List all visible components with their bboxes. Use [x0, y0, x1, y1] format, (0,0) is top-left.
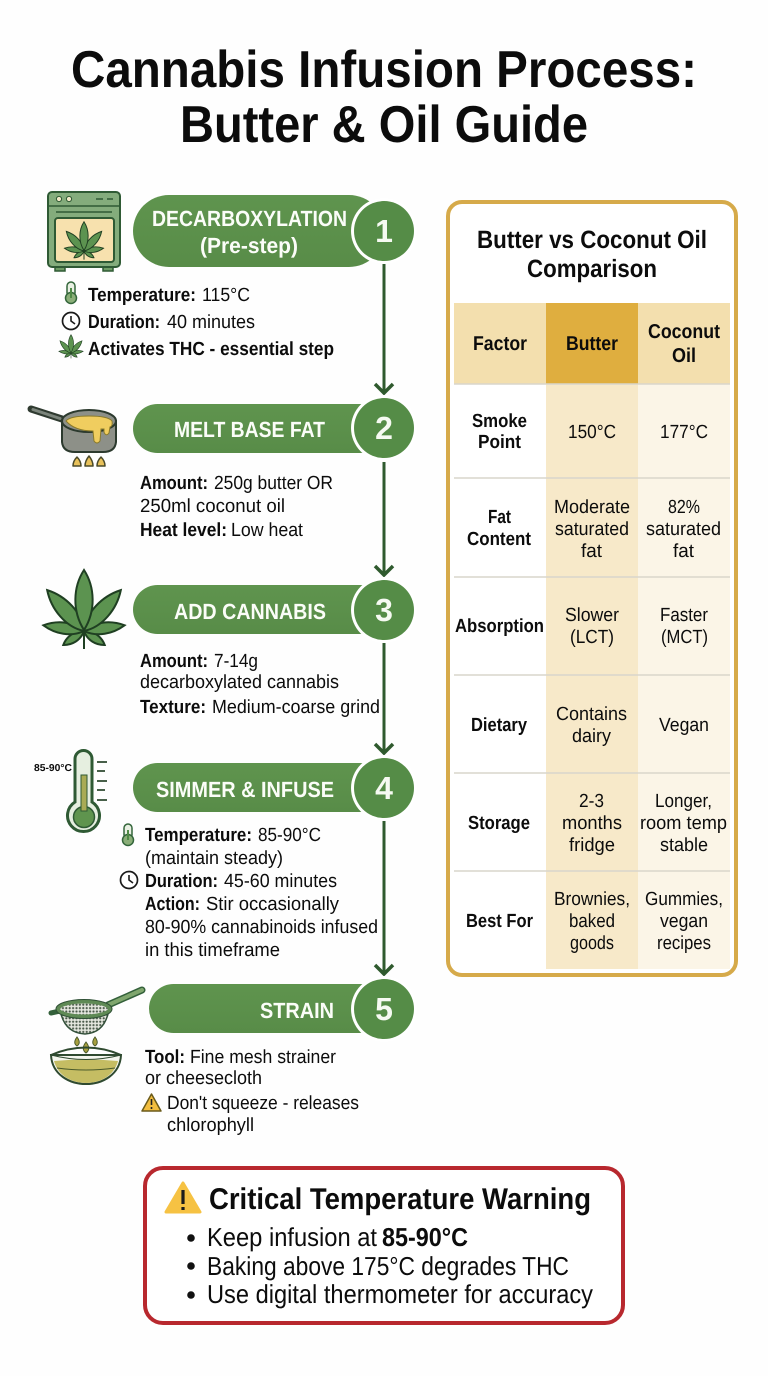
warning bullet list: 85-90°C — [382, 1222, 468, 1252]
step 5 details: chlorophyll — [167, 1115, 254, 1136]
step 5 details: Don't squeeze - releases — [167, 1093, 359, 1114]
icon: cannabis leaf — [41, 570, 127, 649]
row: fat content: 82% — [668, 497, 700, 518]
step 3: add cannabis — [41, 570, 417, 718]
row: best for: vegan — [660, 911, 708, 932]
row: fat content: fat — [673, 541, 695, 562]
table heading — [477, 226, 707, 283]
step 1 details: 115°C — [202, 285, 250, 306]
row: dietary: Vegan — [659, 715, 709, 736]
step 4 details: Stir occasionally — [206, 894, 339, 915]
table heading: Butter vs Coconut Oil — [477, 226, 707, 254]
row: storage: fridge — [569, 835, 615, 856]
step 1 details: Activates THC - essential step — [88, 339, 334, 360]
warning bullet list: Keep infusion at — [207, 1222, 378, 1252]
step 4 details: Temperature: — [145, 825, 252, 846]
row: fat content — [467, 497, 721, 562]
step 4: simmer and infuse — [34, 750, 417, 961]
icon: pot on burner — [31, 409, 116, 466]
row: fat content: saturated — [555, 519, 629, 540]
table header row: Coconut — [648, 321, 720, 343]
step 2 details: 250ml coconut oil — [140, 496, 285, 517]
step 2 details — [140, 473, 333, 541]
row: fat content: Content — [467, 529, 532, 550]
title: Cannabis Infusion Process: — [71, 41, 697, 99]
row: fat content: saturated — [646, 519, 721, 540]
row: absorption: Absorption — [455, 616, 544, 637]
step 4 details: 80-90% cannabinoids infused — [145, 917, 378, 938]
pill heading: decarboxylation — [133, 195, 385, 267]
row: storage — [468, 791, 727, 856]
row: best for: baked — [569, 911, 615, 932]
step 3 details: Medium-coarse grind — [212, 697, 380, 718]
table header row: Factor — [473, 333, 527, 355]
step 2 details: 250g butter OR — [214, 473, 333, 494]
row: fat content: Moderate — [554, 497, 630, 518]
row: storage: stable — [660, 835, 708, 856]
icon: thermometer: 85-90°C — [34, 763, 72, 774]
table column fills — [454, 303, 730, 969]
row: best for: Best For — [466, 911, 534, 932]
step 4 details: 85-90°C — [258, 825, 321, 846]
step 1 details: Temperature: — [88, 285, 196, 306]
row: best for: goods — [570, 933, 614, 954]
title — [71, 41, 697, 154]
step 1: decarboxylation — [48, 192, 417, 360]
number badge 5: 5 — [375, 991, 393, 1027]
table heading: Comparison — [527, 255, 657, 283]
step 3 details: Texture: — [140, 697, 206, 718]
step 1 details — [58, 282, 334, 360]
number badge 1 — [351, 198, 417, 264]
callout: critical temperature warning — [145, 1168, 623, 1323]
step 4 details: Action: — [145, 894, 200, 915]
number badge 3 — [351, 577, 417, 643]
row: best for — [466, 889, 723, 954]
row: fat content: fat — [581, 541, 603, 562]
flow arrows between steps — [375, 264, 393, 974]
table header row: Butter — [566, 333, 618, 355]
panel: butter vs coconut oil comparison — [448, 202, 736, 975]
pill heading: strain — [149, 984, 385, 1033]
pill heading: decarboxylation: DECARBOXYLATION — [152, 206, 347, 231]
warning heading: Critical Temperature Warning — [209, 1183, 591, 1216]
row: storage: Longer, — [655, 791, 712, 812]
row: absorption: (MCT) — [661, 627, 708, 648]
row: best for: Gummies, — [645, 889, 723, 910]
row: dietary: dairy — [572, 726, 611, 747]
number badge 4: 4 — [375, 770, 393, 806]
row: best for: recipes — [657, 933, 711, 954]
step 5 details: Fine mesh strainer — [190, 1047, 337, 1068]
step 4 details: in this timeframe — [145, 940, 280, 961]
icon: oven — [48, 192, 120, 271]
step 4 details: 45-60 minutes — [224, 871, 337, 892]
step 2: melt base fat — [31, 395, 417, 541]
row: absorption — [455, 605, 709, 648]
step 3 details: 7-14g — [214, 651, 258, 672]
step 2 details: Amount: — [140, 473, 208, 494]
number badge 3: 3 — [375, 592, 393, 628]
table header row — [473, 321, 720, 367]
row: dietary: Dietary — [471, 715, 527, 736]
row: smoke point: 177°C — [660, 422, 708, 443]
row: dietary — [471, 704, 709, 747]
pill heading: add cannabis — [133, 585, 385, 634]
row: dietary: Contains — [556, 704, 627, 725]
step 1 details: Duration: — [88, 312, 160, 333]
pill heading: decarboxylation: (Pre-step) — [200, 233, 298, 258]
icon: strainer and bowl — [51, 990, 142, 1084]
icon: warning triangle — [166, 1183, 200, 1212]
pill heading: simmer and infuse: SIMMER & INFUSE — [156, 777, 334, 802]
number badge 2 — [351, 395, 417, 461]
pill heading: melt base fat — [133, 404, 385, 453]
row: smoke point: Point — [478, 432, 522, 453]
row: storage: months — [562, 813, 622, 834]
row: absorption: Faster — [660, 605, 709, 626]
pill heading: strain: STRAIN — [260, 998, 334, 1023]
title: Butter & Oil Guide — [180, 96, 588, 154]
row: smoke point: Smoke — [472, 411, 527, 432]
step 5 details — [142, 1047, 359, 1136]
warning bullet list: Use digital thermometer for accuracy — [207, 1279, 593, 1309]
number badge 4 — [351, 755, 417, 821]
table header row: Oil — [672, 345, 696, 367]
step 5 details: Tool: — [145, 1047, 185, 1068]
number badge 5 — [351, 976, 417, 1042]
pill heading: melt base fat: MELT BASE FAT — [174, 417, 325, 442]
warning bullet list — [187, 1222, 593, 1309]
number badge 2: 2 — [375, 410, 393, 446]
row: fat content: Fat — [488, 507, 512, 528]
number badge 1: 1 — [375, 213, 393, 249]
row: smoke point: 150°C — [568, 422, 616, 443]
icon: thermometer — [34, 750, 107, 832]
row: absorption: (LCT) — [570, 627, 614, 648]
step 4 details — [120, 824, 378, 961]
step 5 details: or cheesecloth — [145, 1068, 262, 1089]
row: absorption: Slower — [565, 605, 620, 626]
pill heading: add cannabis: ADD CANNABIS — [174, 599, 326, 624]
row: storage: room temp — [640, 813, 727, 834]
warning bullet list: Baking above 175°C degrades THC — [207, 1251, 569, 1281]
step 5: strain — [51, 976, 417, 1136]
step 2 details: Low heat — [231, 520, 304, 541]
step 4 details: (maintain steady) — [145, 848, 283, 869]
row: best for: Brownies, — [554, 889, 630, 910]
pill heading: simmer and infuse — [133, 763, 385, 812]
step 3 details: decarboxylated cannabis — [140, 672, 339, 693]
step 3 details — [140, 651, 380, 718]
row: storage: 2-3 — [579, 791, 604, 812]
step 3 details: Amount: — [140, 651, 208, 672]
step 2 details: Heat level: — [140, 520, 227, 541]
row: smoke point — [472, 411, 708, 453]
step 1 details: 40 minutes — [167, 312, 255, 333]
step 4 details: Duration: — [145, 871, 218, 892]
row: storage: Storage — [468, 813, 530, 834]
